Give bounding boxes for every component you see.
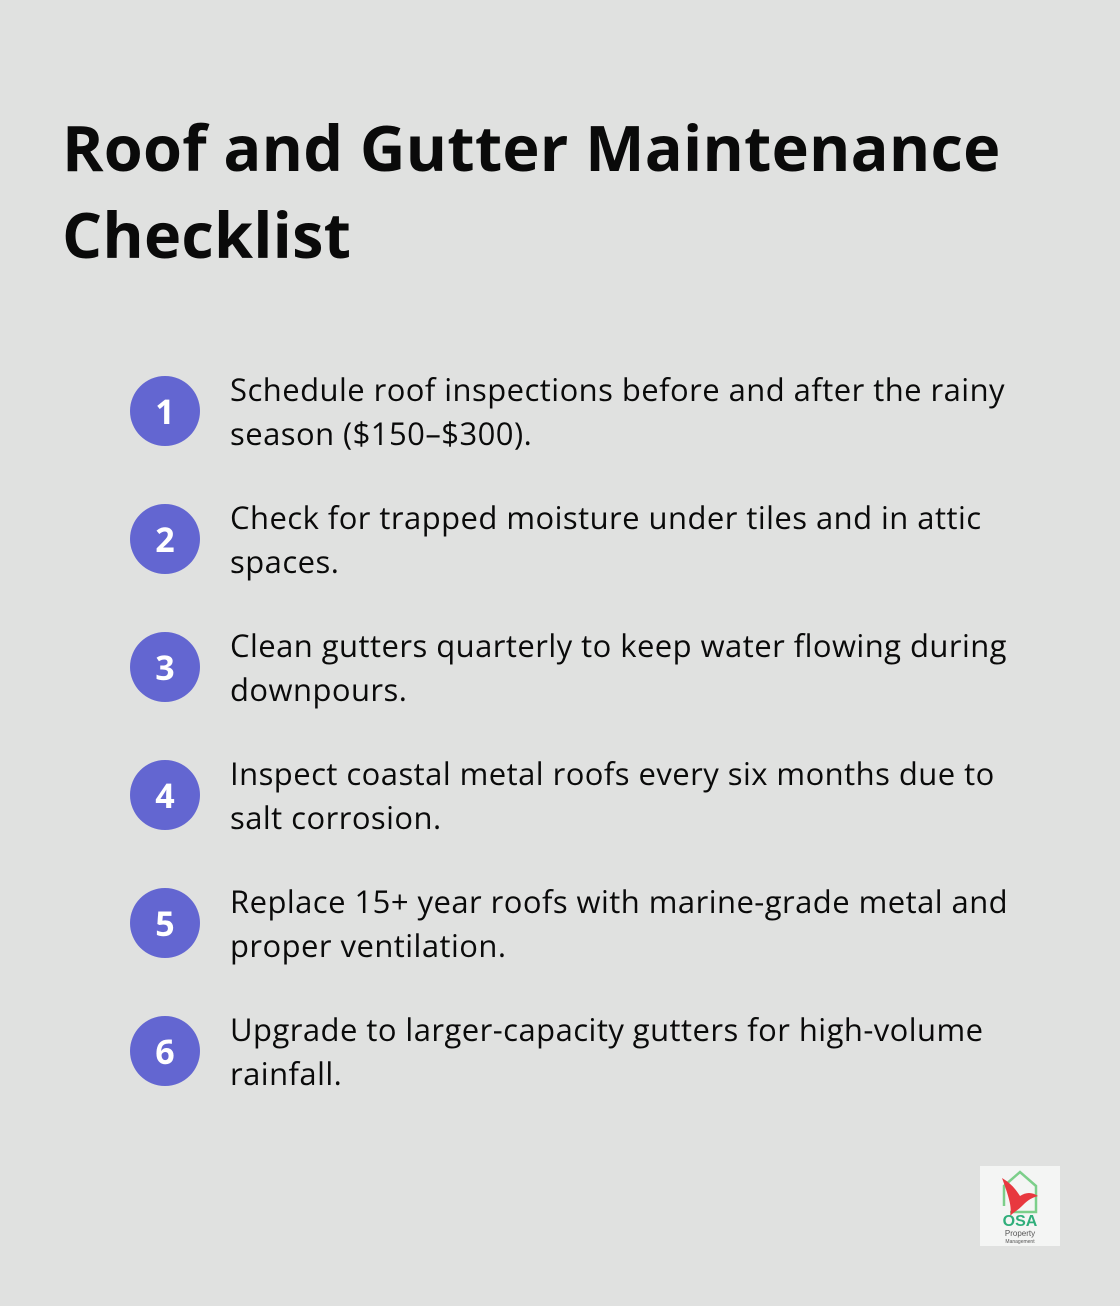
item 6: 6 <box>155 1028 175 1074</box>
item 5 <box>130 881 1008 967</box>
item 3: 3 <box>155 644 175 690</box>
logo: Management <box>1005 1239 1035 1245</box>
item 1: Schedule roof inspections before and after the rainy <box>230 369 1005 411</box>
item 2 <box>130 497 982 583</box>
item 6: Upgrade to larger-capacity gutters for high-volume <box>230 1009 984 1051</box>
item 1: 1 <box>155 388 175 434</box>
logo <box>980 1166 1060 1246</box>
title: Checklist <box>62 192 351 277</box>
item 1 <box>130 369 1005 455</box>
item 3 <box>130 625 1007 711</box>
item 5: Replace 15+ year roofs with marine-grade metal and <box>230 881 1008 923</box>
item 4: 4 <box>155 772 175 818</box>
item 1: season ($150–$300). <box>230 413 532 455</box>
item 2: 2 <box>155 516 175 562</box>
item 6: rainfall. <box>230 1053 342 1095</box>
item 6 <box>130 1009 984 1095</box>
title: Roof and Gutter Maintenance <box>62 105 1000 190</box>
item 4: salt corrosion. <box>230 797 442 839</box>
title <box>62 105 1000 277</box>
item 2: spaces. <box>230 541 339 583</box>
item 4 <box>130 753 995 839</box>
item 2: Check for trapped moisture under tiles and in attic <box>230 497 982 539</box>
logo: OSA <box>1003 1213 1038 1230</box>
item 5: 5 <box>155 900 175 946</box>
item 4: Inspect coastal metal roofs every six months due to <box>230 753 995 795</box>
item 3: Clean gutters quarterly to keep water flowing during <box>230 625 1007 667</box>
item 3: downpours. <box>230 669 407 711</box>
logo: Property <box>1005 1229 1035 1238</box>
item 5: proper ventilation. <box>230 925 506 967</box>
